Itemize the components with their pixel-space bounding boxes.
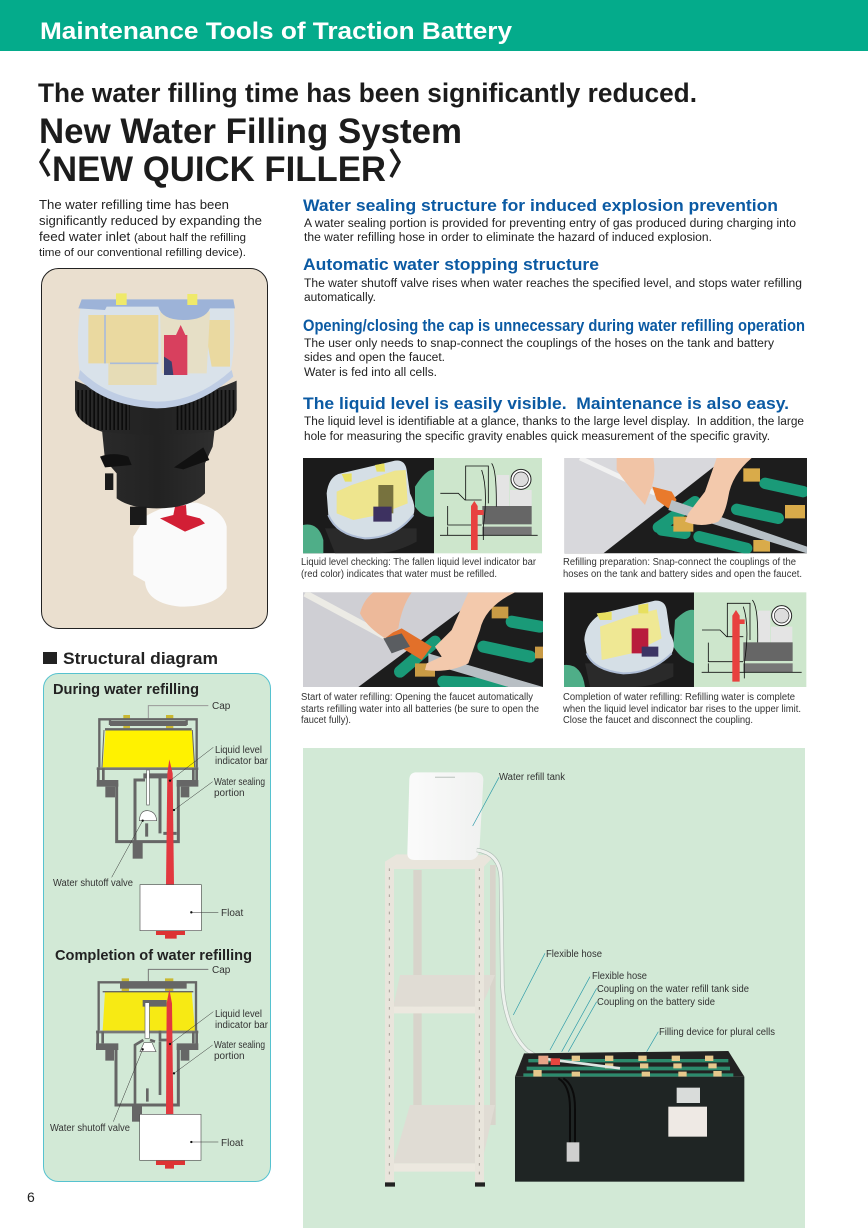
feature text column xyxy=(303,196,805,443)
caption: refilling preparation: hoses on the tank and battery sides and open the faucet. xyxy=(563,569,802,580)
feature: water sealing: the water refilling hose in order to eliminate the hazard of induced explosion. xyxy=(304,232,712,244)
diagram: during water refilling xyxy=(53,681,269,939)
feature: automatic stopping: automatically. xyxy=(304,292,376,304)
red indicator xyxy=(164,325,187,375)
page number: 6 xyxy=(27,1189,35,1205)
feature: automatic stopping: The water shutoff valve rises when water reaches the specified level, and stops water refilling xyxy=(304,278,802,290)
feature: liquid level: hole for measuring the specific gravity enables quick measurement of the specific gravity. xyxy=(304,431,770,443)
header band xyxy=(0,0,868,51)
labels: completion: portion xyxy=(214,1051,245,1062)
photo: start of refilling xyxy=(303,592,543,687)
feature: cap opening xyxy=(303,316,805,379)
yellow filling xyxy=(88,315,230,367)
shelf rack xyxy=(385,854,496,1187)
caption: liquid level checking: (red color) indicates that water must be refilled. xyxy=(301,569,497,580)
feature: water sealing xyxy=(303,196,796,244)
caption: completion: when the liquid level indicator bar rises to the upper limit. xyxy=(562,704,801,715)
caption: refilling preparation: Refilling preparation: Snap-connect the couplings of the xyxy=(563,557,797,568)
knurled ring xyxy=(73,381,238,435)
diagram: level full xyxy=(694,592,806,687)
labels: completion: Water sealing xyxy=(214,1040,265,1051)
feature: cap opening: sides and open the faucet. xyxy=(304,352,445,364)
diagram: level low xyxy=(434,458,542,553)
photo captions xyxy=(301,557,802,726)
system labels: Flexible hose xyxy=(546,949,603,960)
heading: during: During water refilling xyxy=(53,681,199,698)
blue rim xyxy=(78,299,235,320)
intro paragraph: The water refilling time has been xyxy=(39,197,229,212)
caption: refilling preparation xyxy=(563,557,802,580)
feature: cap opening: The user only needs to snap-connect the couplings of the hoses on the tank and battery xyxy=(304,338,774,350)
float xyxy=(133,503,227,607)
caption: liquid level checking xyxy=(301,557,537,580)
system illustration xyxy=(385,772,744,1187)
feature: liquid level: The liquid level is identifiable at a glance, thanks to the large level display. In addition, the large xyxy=(304,416,804,428)
labels: completion: Float xyxy=(221,1138,243,1149)
main headings xyxy=(38,78,697,189)
photo: completion of refilling xyxy=(564,592,806,687)
caption: start of refilling: Start of water refilling: Opening the faucet automatically xyxy=(301,692,533,703)
caption: completion: Completion of water refilling: Refilling water is complete xyxy=(563,692,796,703)
clear dome xyxy=(78,299,234,407)
labels: completion xyxy=(50,965,269,1149)
caption: start of refilling: starts refilling water into all batteries (be sure to open the xyxy=(301,704,540,715)
labels: completion: indicator bar xyxy=(215,1020,269,1031)
caption: liquid level checking: Liquid level checking: The fallen liquid level indicator bar xyxy=(301,557,537,568)
leader lines xyxy=(473,777,658,1052)
system labels xyxy=(499,772,775,1038)
intro paragraph xyxy=(39,197,262,259)
labels: during xyxy=(53,701,269,919)
labels: completion: Cap xyxy=(212,965,231,976)
water tank xyxy=(407,772,483,860)
panel: structural diagrams xyxy=(44,674,270,1182)
labels: during: portion xyxy=(214,788,245,799)
feature: cap opening: Water is fed into all cells. xyxy=(304,367,437,379)
labels: during: indicator bar xyxy=(215,756,269,767)
battery xyxy=(515,1051,744,1182)
feature: cap opening: Opening/closing the cap is unnecessary during water refilling operation xyxy=(303,316,805,335)
system labels: Water refill tank xyxy=(499,772,565,783)
labels: during: Water sealing xyxy=(214,777,265,788)
heading: structural diagram: Structural diagram xyxy=(63,649,218,668)
photo: quick filler device xyxy=(73,293,238,607)
intro paragraph: time of our conventional refilling device). xyxy=(39,247,246,259)
drawing: completion xyxy=(96,969,218,1169)
feature: liquid level: The liquid level is easily visible. Maintenance is also easy. xyxy=(303,394,789,413)
feature: automatic stopping: Automatic water stopping structure xyxy=(303,255,599,274)
feature: water sealing: A water sealing portion is provided for preventing entry of gas produced during charging into xyxy=(304,218,796,230)
feature: automatic stopping xyxy=(303,255,802,304)
caption: start of refilling: faucet fully). xyxy=(301,715,351,726)
intro paragraph: feed water inlet (about half the refilling xyxy=(39,229,246,244)
system labels: Filling device for plural cells xyxy=(659,1027,775,1038)
lower body xyxy=(102,427,215,508)
intro paragraph: significantly reduced by expanding the xyxy=(39,213,262,228)
photo steps xyxy=(303,458,807,687)
labels: completion: Water shutoff valve xyxy=(50,1123,130,1134)
system labels: Coupling on the water refill tank side xyxy=(597,984,750,995)
panel: product photo xyxy=(42,268,268,628)
caption: start of refilling xyxy=(301,692,540,726)
system labels: Flexible hose xyxy=(592,971,648,982)
caption: completion xyxy=(562,692,801,726)
drawing: during xyxy=(97,706,218,939)
labels: completion: Liquid level xyxy=(215,1009,262,1020)
heading: completion: Completion of water refilling xyxy=(55,947,252,964)
labels: during: Water shutoff valve xyxy=(53,878,133,889)
labels: during: Float xyxy=(221,908,243,919)
photo: refilling preparation xyxy=(564,458,807,553)
panel: system overview xyxy=(303,748,805,1228)
diagram: completion of water refilling xyxy=(50,947,269,1169)
product name with chevrons: NEW QUICK FILLER xyxy=(52,150,386,189)
feature: liquid level xyxy=(303,394,804,443)
header title: Maintenance Tools of Traction Battery xyxy=(40,18,513,45)
labels: during: Liquid level xyxy=(215,745,262,756)
flexible hose xyxy=(477,850,542,1060)
title: New Water Filling System xyxy=(39,112,462,151)
subtitle: The water filling time has been significantly reduced. xyxy=(38,78,697,108)
labels: during: Cap xyxy=(212,701,231,712)
system labels: Coupling on the battery side xyxy=(597,997,716,1008)
caption: completion: Close the faucet and disconnect the coupling. xyxy=(563,715,753,726)
photo: liquid level checking xyxy=(303,458,542,553)
feature: water sealing: Water sealing structure for induced explosion prevention xyxy=(303,196,778,215)
